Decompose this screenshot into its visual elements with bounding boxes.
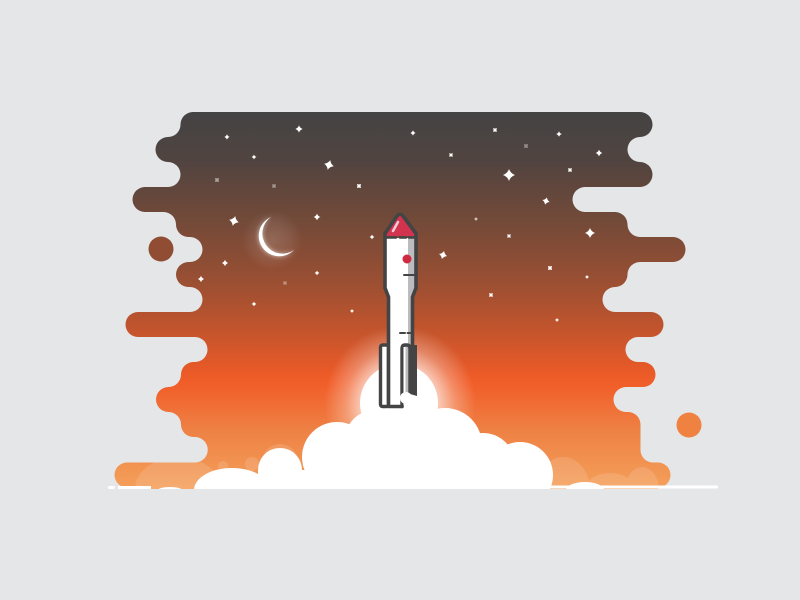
floating circle right: [676, 412, 702, 438]
rocket body: [385, 238, 408, 406]
rocket: [380, 214, 417, 406]
smoke cloud: [158, 392, 604, 489]
body line: [404, 274, 414, 276]
left booster: [380, 345, 388, 406]
exhaust puff: [400, 392, 411, 404]
sky blob with gradient: [100, 100, 700, 495]
red porthole: [402, 254, 412, 264]
faint background clouds: [135, 444, 658, 489]
stage line: [400, 332, 412, 334]
nose separator dashed line: [387, 236, 414, 239]
right booster: [402, 345, 410, 406]
nose highlight: [393, 222, 398, 231]
rocket outline: [385, 214, 416, 406]
ground line: [108, 486, 718, 489]
launch glow: [324, 326, 476, 478]
crescent moon: [242, 210, 302, 270]
rocket launch illustration: [108, 112, 718, 489]
cloud dome behind rocket: [360, 364, 438, 442]
floating circle left: [148, 236, 174, 262]
nose cone: [386, 214, 415, 236]
right dark fairing: [410, 345, 417, 396]
stars: [198, 125, 602, 322]
